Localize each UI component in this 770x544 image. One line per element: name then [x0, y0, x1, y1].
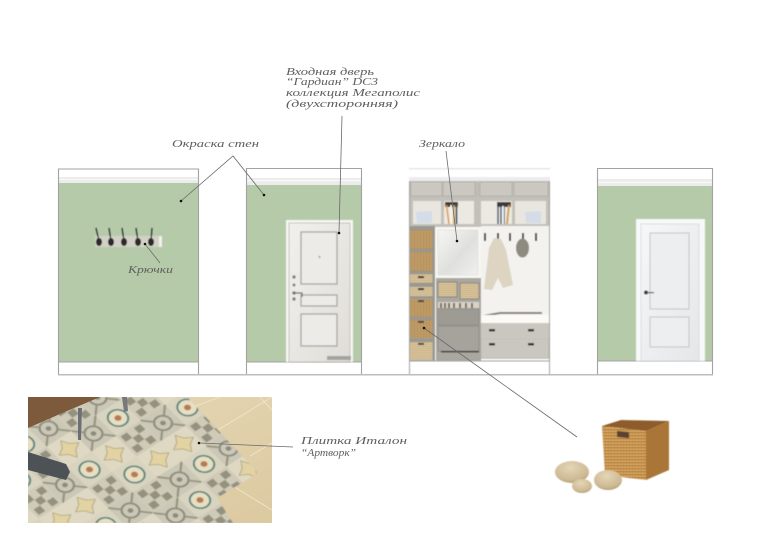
- wall frieze: [246, 169, 362, 185]
- wall outline: [58, 169, 199, 375]
- mirror: [435, 227, 481, 278]
- wall outline: [246, 168, 362, 375]
- label: entrance door: “Гардиан” DC3: [286, 76, 379, 88]
- label: tile: Плитка Италон: [300, 435, 408, 447]
- chair legs: [28, 397, 128, 480]
- beige floor: [28, 397, 272, 523]
- wicker storage box: [602, 420, 669, 480]
- label: entrance door: коллекция Мегаполис: [286, 87, 420, 99]
- entrance door: [286, 220, 353, 362]
- hooks: [484, 233, 537, 241]
- label: entrance door: (двухсторонняя): [286, 98, 398, 110]
- panel: wall with interior door: [597, 168, 713, 375]
- round wicker baskets: [555, 461, 622, 493]
- floor tile photo: [28, 397, 272, 523]
- open shelves: [409, 197, 549, 227]
- back wall white beadboard: [481, 226, 549, 316]
- panel: wall with entrance door: [246, 168, 362, 375]
- floor baseline: [58, 374, 713, 376]
- wall frieze: [58, 169, 199, 183]
- patchwork tile area: [28, 397, 258, 523]
- green wall paint: [246, 185, 362, 362]
- label: tile: [300, 435, 408, 459]
- label: entrance door: Входная дверь: [286, 66, 374, 78]
- wall frieze: [409, 168, 550, 181]
- furniture wood: [28, 397, 100, 428]
- top cabinets: [409, 181, 549, 198]
- wall outline: [597, 168, 713, 375]
- green wall paint: [597, 186, 713, 361]
- panel: wall with hooks: [58, 169, 199, 375]
- label: wall paint: Окраска стен: [172, 138, 260, 150]
- gray cabinet: [436, 278, 481, 361]
- green wall paint: [58, 183, 199, 362]
- hat: [516, 238, 529, 258]
- leader dots: [144, 194, 458, 444]
- label: tile: “Артворк”: [301, 447, 356, 459]
- interior door: [636, 219, 705, 361]
- plain tile joints: [195, 397, 272, 510]
- coat: [484, 238, 513, 290]
- label: entrance door: [286, 66, 420, 110]
- leader lines: [145, 116, 577, 447]
- tall basket shelf: [409, 226, 435, 361]
- panel: hallway storage unit: [409, 168, 550, 375]
- label: hooks: Крючки: [127, 264, 174, 276]
- label: mirror: Зеркало: [419, 138, 466, 150]
- icon: coat hook rail: [95, 228, 162, 247]
- wall outline: [409, 181, 550, 375]
- bench: [481, 313, 549, 358]
- wall frieze: [597, 169, 713, 186]
